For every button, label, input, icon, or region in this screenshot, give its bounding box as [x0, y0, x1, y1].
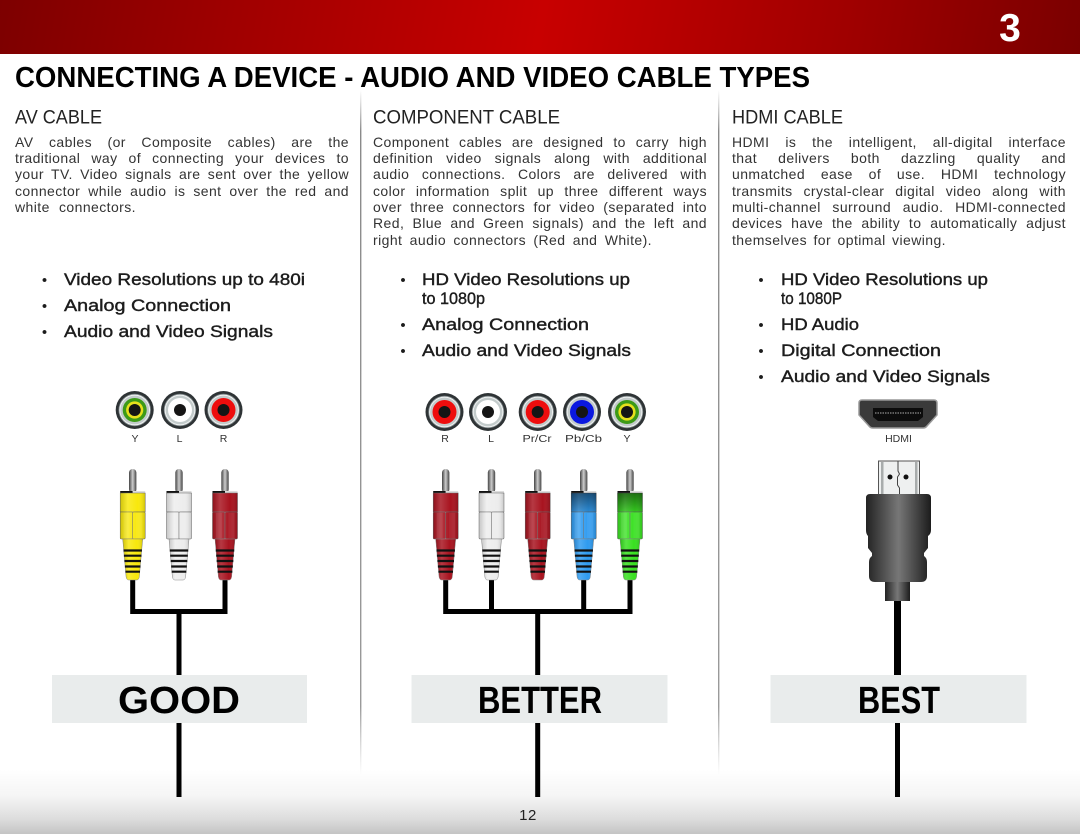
rating: best: BEST	[858, 680, 940, 722]
chapter number: 3	[999, 7, 1021, 50]
feature list: HD Video Resolutions up	[781, 271, 988, 289]
body text: HDMI cable: multi-channel surround audio. HDMI-connected	[732, 199, 1066, 215]
title: CONNECTING A DEVICE - AUDIO AND VIDEO CABLE TYPES	[15, 62, 810, 94]
jacks: Y L R	[116, 391, 242, 445]
jacks: R L Pr Pb Y	[426, 393, 646, 445]
body text: component cable: Red, Blue and Green signals) and the left and	[373, 215, 707, 231]
rating: better	[412, 675, 668, 723]
HDMI port	[859, 400, 937, 445]
body text: HDMI cable: that delivers both dazzling quality and	[732, 150, 1066, 166]
body text: HDMI cable: devices have the ability to automatically adjust	[732, 215, 1066, 231]
feature list: Video Resolutions up to 480i	[64, 271, 305, 289]
body text: component cable: right audio connectors (Red and White).	[373, 232, 652, 248]
feature list: Analog Connection	[422, 316, 589, 334]
body text: component cable: over three connectors for video (separated into	[373, 199, 707, 215]
rating: best	[770, 675, 1026, 723]
feature list: HD Audio	[781, 316, 859, 334]
jacks: R L Pr Pb Y: Pb/Cb	[565, 433, 602, 445]
page number: 12	[519, 807, 537, 824]
jacks: R L Pr Pb Y: R	[441, 433, 449, 445]
heading: component cable: COMPONENT CABLE	[373, 106, 560, 128]
feature list: Audio and Video Signals	[64, 323, 273, 341]
panel: component cable	[373, 106, 707, 797]
feature list	[43, 271, 305, 341]
body text: component cable: color information split up three different ways	[373, 183, 707, 199]
body text: AV cable: traditional way of connecting your devices to	[15, 150, 349, 166]
RCA plugs and wires	[433, 469, 642, 797]
body text: component cable: definition video signals along with additional	[373, 150, 707, 166]
body text: HDMI cable: themselves for optimal viewing.	[732, 232, 946, 248]
heading: AV cable: AV CABLE	[15, 106, 102, 128]
divider right	[718, 93, 720, 767]
panel: HDMI cable	[732, 106, 1066, 797]
body text: AV cable	[15, 134, 349, 215]
body text: AV cable: connector while audio is sent over the red and	[15, 183, 349, 199]
body text: AV cable: your TV. Video signals are sent over the yellow	[15, 166, 349, 182]
panel: AV cable	[15, 106, 349, 797]
body text: component cable: Component cables are designed to carry high	[373, 134, 707, 150]
body text: AV cable: AV cables (or Composite cables) are the	[15, 134, 349, 150]
divider left	[360, 94, 362, 767]
feature list: HD Video Resolutions up	[422, 271, 630, 289]
rating: better: BETTER	[478, 680, 602, 722]
rating: good	[52, 675, 307, 723]
HDMI port: HDMI	[885, 433, 912, 445]
body text: HDMI cable: transmits crystal-clear digital video along with	[732, 183, 1066, 199]
jacks: Y L R: L	[177, 433, 183, 445]
body text: HDMI cable: unmatched ease of use. HDMI technology	[732, 166, 1066, 182]
jacks: Y L R: R	[220, 433, 228, 445]
body text: HDMI cable: HDMI is the intelligent, all-digital interface	[732, 134, 1066, 150]
heading: HDMI cable: HDMI CABLE	[732, 106, 843, 128]
feature list: Audio and Video Signals	[781, 368, 990, 386]
header band	[0, 0, 1080, 54]
body text: component cable: audio connections. Colors are delivered with	[373, 166, 707, 182]
body text: HDMI cable	[732, 134, 1066, 248]
feature list: Audio and Video Signals	[422, 342, 631, 360]
HDMI plug and wire	[866, 461, 931, 797]
jacks: R L Pr Pb Y: Y	[623, 433, 631, 445]
jacks: R L Pr Pb Y: L	[488, 433, 494, 445]
feature list	[401, 271, 631, 360]
feature list	[759, 271, 990, 386]
body text: AV cable: white connectors.	[15, 199, 136, 215]
feature list: Analog Connection	[64, 297, 231, 315]
bottom fade background	[0, 770, 1080, 834]
jacks: Y L R: Y	[131, 433, 139, 445]
rating: good: GOOD	[118, 680, 240, 722]
feature list: to 1080p	[422, 290, 485, 308]
RCA plugs and wires	[120, 469, 238, 797]
feature list: Digital Connection	[781, 342, 941, 360]
jacks: R L Pr Pb Y: Pr/Cr	[522, 433, 552, 445]
feature list: to 1080P	[781, 290, 842, 308]
body text: component cable	[373, 134, 707, 248]
